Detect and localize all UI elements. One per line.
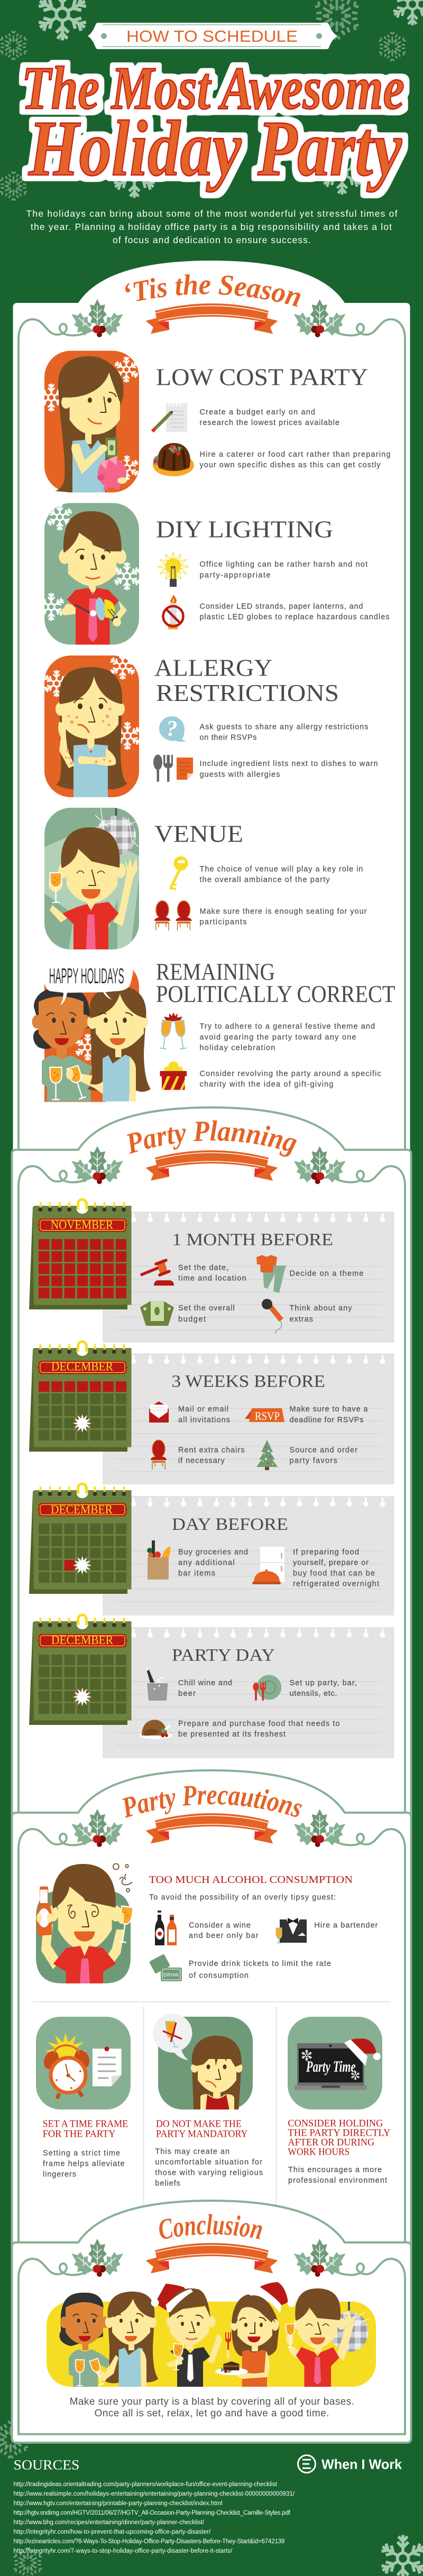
illustration: diy lighting man	[38, 503, 141, 645]
text: set the date: Set the date,	[178, 1263, 228, 1272]
text: rent chairs	[178, 1446, 244, 1465]
icon: bottles	[155, 1910, 177, 1945]
source links	[14, 2481, 295, 2554]
icon: key	[170, 856, 188, 889]
calendar: december first week	[29, 1342, 131, 1452]
banner: how to schedule: HOW TO SCHEDULE	[126, 27, 298, 45]
intro paragraph	[26, 208, 398, 245]
logo: when i work	[298, 2455, 402, 2473]
icon: gift	[160, 1061, 187, 1090]
heading: 3 weeks before: 3 WEEKS BEFORE	[171, 1372, 325, 1391]
text: party favors	[290, 1446, 357, 1465]
heading: work hours: THE PARTY DIRECTLY	[288, 2127, 391, 2138]
text: conclusion	[70, 2396, 354, 2419]
source links: http://hgtv.sndimg.com/HGTV/2011/06/27/HGTV_All-Occasion-Party-Planning-Checklist_Camille-Styles.pdf	[14, 2510, 291, 2516]
card: time frame	[36, 2017, 131, 2178]
text: overall budget: budget	[178, 1315, 206, 1324]
section heading: conclusion: Conclusion	[159, 2214, 262, 2239]
illustration: party group	[47, 2282, 376, 2387]
text: charity tip	[200, 1070, 381, 1089]
text: overall budget: Set the overall	[178, 1304, 235, 1313]
heading: remaining politically correct: REMAINING	[156, 959, 275, 985]
text: rsvp deadline: deadline for RSVPs	[290, 1416, 364, 1424]
text: charity tip: charity with the idea of gift-giving	[200, 1081, 333, 1089]
heading: not mandatory: PARTY MANDATORY	[156, 2128, 248, 2139]
text: work hours: This encourages a more	[288, 2166, 382, 2174]
text: lighting tip	[200, 560, 367, 579]
icon: notepad and pencil	[152, 403, 187, 432]
text: wine and beer	[189, 1921, 259, 1940]
icon: microphone	[262, 1299, 282, 1334]
text: led tip: Consider LED strands, paper lanterns, and	[200, 603, 363, 611]
icon: christmas tree	[256, 1440, 278, 1470]
icon: light bulb	[158, 552, 189, 587]
heading: allergy restrictions	[154, 655, 339, 706]
text: buy groceries: Buy groceries and	[178, 1548, 248, 1557]
section heading: party precautions	[17, 1786, 406, 1848]
text: conclusion: Once all is set, relax, let go and have a good time.	[95, 2408, 329, 2419]
text: think about extras: Think about any	[290, 1304, 352, 1313]
card: 1 month before	[29, 1199, 394, 1343]
person 1	[59, 2293, 109, 2387]
icon: laptop with santa hat	[295, 2038, 381, 2090]
text: prepare food: If preparing food	[293, 1548, 359, 1557]
heading: too much alcohol: TOO MUCH ALCOHOL CONSUMPTION	[149, 1874, 353, 1886]
heading: day before: DAY BEFORE	[172, 1515, 288, 1534]
illustration: low cost woman	[38, 351, 139, 493]
illustration: happy holidays pair	[32, 954, 151, 1102]
text: set the date	[178, 1263, 246, 1282]
speech bubble: no drinks	[153, 2014, 192, 2060]
heading: sources: SOURCES	[14, 2457, 79, 2472]
icon: rsvp card: RSVP	[255, 1409, 280, 1423]
text: chill wine	[178, 1679, 232, 1698]
source links: http://integrityhr.com/how-to-prevent-that-upcoming-office-party-disaster/	[14, 2529, 211, 2535]
text: budget tip: Create a budget early on and	[200, 408, 315, 417]
heading: party day: PARTY DAY	[172, 1646, 275, 1665]
snowflakes: bottom	[12, 2535, 423, 2576]
heading: remaining politically correct: POLITICALLY CORRECT	[156, 981, 396, 1008]
text: hire bartender: Hire a bartender	[314, 1921, 378, 1929]
icon: cutlery and list	[153, 755, 193, 782]
illustration: venue man	[44, 806, 139, 949]
heading: allergy restrictions: RESTRICTIONS	[156, 680, 339, 706]
text: rent chairs: if necessary	[178, 1457, 225, 1465]
icon: question bubble	[159, 716, 187, 742]
text: prepare fresh food	[178, 1720, 340, 1739]
section heading: tis the season	[17, 274, 406, 338]
icon: bartender	[276, 1918, 307, 1943]
calendar: december day before: DECEMBER	[51, 1503, 113, 1516]
icon: clothes	[256, 1255, 286, 1293]
heading: work hours: CONSIDER HOLDING	[288, 2118, 383, 2129]
text: venue tip: the overall ambiance of the party	[200, 876, 330, 884]
text: mail invitations: Mail or email	[178, 1405, 228, 1414]
source links: http://www.realsimple.com/holidays-entertaining/entertaining/party-planning-checklist-00000000000931/	[14, 2491, 295, 2497]
text: decide theme: Decide on a theme	[290, 1270, 364, 1278]
banner: how to schedule	[88, 23, 337, 49]
text: prepare food	[293, 1548, 379, 1588]
panel inner border	[19, 1185, 405, 1821]
text: seating tip	[200, 907, 367, 926]
text: prepare food: yourself, prepare or	[293, 1558, 369, 1567]
text: mail invitations	[178, 1405, 230, 1424]
person 5	[286, 2288, 355, 2387]
calendar: december first week: DECEMBER	[51, 1360, 114, 1373]
text: drink tickets	[189, 1960, 331, 1980]
icon: question bubble: ?	[166, 717, 178, 741]
text: led tip: plastic LED globes to replace hazardous candles	[200, 613, 389, 622]
source links: http://www.bhg.com/recipes/entertaining/dinner/party-planner-checklist/	[14, 2519, 205, 2526]
heading: low cost party: LOW COST PARTY	[156, 364, 368, 391]
intro paragraph: the year. Planning a holiday office party is a big responsibility and takes a lot	[31, 221, 392, 232]
text: not mandatory: beliefs	[155, 2179, 180, 2187]
text: not mandatory: those with varying religious	[155, 2169, 263, 2177]
icon: plate and cutlery	[253, 1675, 281, 1701]
text: chill wine: beer	[178, 1689, 196, 1698]
heading: work hours	[288, 2118, 391, 2158]
text: prepare fresh food: Prepare and purchase food that needs to	[178, 1720, 340, 1728]
text: caterer tip	[200, 450, 390, 469]
section heading: conclusion	[17, 2214, 406, 2277]
icon: drink tickets	[149, 1954, 182, 1981]
text: work hours: professional environment	[288, 2176, 387, 2185]
card: work hours	[288, 2017, 391, 2185]
text: set up party: utensils, etc.	[290, 1689, 337, 1698]
icon: two chairs	[154, 901, 191, 930]
text: festive theme tip: holiday celebration	[200, 1044, 275, 1052]
text: lighting tip: Office lighting can be rather harsh and not	[200, 560, 367, 569]
icon: no candles	[163, 595, 183, 629]
card: day before	[29, 1484, 394, 1615]
text: prepare fresh food: be presented at its freshest	[178, 1730, 286, 1739]
source links: http://integrityhr.com/7-ways-to-stop-holiday-office-party-disaster-before-it-starts/	[14, 2548, 233, 2554]
calendar: december party day	[29, 1615, 131, 1725]
text: rsvp deadline: Make sure to have a	[290, 1405, 368, 1414]
icon: laptop with santa hat: Party Time	[306, 2058, 355, 2075]
text: festive theme tip: Try to adhere to a general festive theme and	[200, 1022, 375, 1031]
icon: note	[93, 2047, 122, 2086]
text: drink tickets: of consumption	[189, 1971, 249, 1980]
calendar: december day before	[29, 1484, 131, 1594]
text: time frame	[43, 2149, 125, 2178]
text: prepare food: buy food that can be	[293, 1569, 375, 1578]
person 4 with santa hat	[215, 2282, 295, 2387]
text: time frame: lingerers	[43, 2170, 76, 2178]
intro paragraph: of focus and dedication to ensure success.	[113, 235, 311, 245]
heading: time frame: FOR THE PARTY	[43, 2128, 116, 2139]
text: drink tickets: Provide drink tickets to limit the rate	[189, 1960, 331, 1968]
heading: allergy restrictions: ALLERGY	[154, 655, 272, 681]
text: venue tip: The choice of venue will play a key role in	[200, 865, 363, 873]
card: party day	[29, 1615, 394, 1758]
text: rsvp allergy tip: Ask guests to share any allergy restrictions	[200, 723, 368, 732]
text: mail invitations: all invitations	[178, 1416, 230, 1424]
section heading: party precautions: Party Precautions	[123, 1786, 302, 1818]
card: 3 weeks before	[29, 1342, 394, 1484]
text: ingredient tip: guests with allergies	[200, 770, 280, 779]
text: chill wine: Chill wine and	[178, 1679, 232, 1687]
source links: http://ezinearticles.com/?8-Ways-To-Stop-Holiday-Office-Party-Disasters-Before-They-Start&id=6742139	[14, 2538, 284, 2545]
illustration: happy holidays pair: HAPPY HOLIDAYS	[49, 964, 124, 988]
icon: rsvp card	[245, 1408, 284, 1423]
text: charity tip: Consider revolving the party around a specific	[200, 1070, 381, 1078]
text: work hours	[288, 2166, 387, 2185]
intro paragraph: The holidays can bring about some of the most wonderful yet stressful times of	[26, 208, 398, 219]
illustration: allergic woman	[43, 653, 141, 797]
text: wine and beer: and beer only bar	[189, 1932, 259, 1940]
icon: fridge and cloche	[252, 1547, 284, 1584]
icon: chair	[151, 1440, 167, 1470]
illustration: tipsy man	[36, 1864, 133, 1983]
card: not mandatory	[153, 2014, 263, 2187]
person 3 with santa hat	[151, 2284, 222, 2387]
text: time frame: frame helps alleviate	[43, 2160, 125, 2168]
heading: diy lighting: DIY LIGHTING	[156, 516, 333, 543]
text: not mandatory: uncomfortable situation for	[155, 2158, 262, 2166]
disco ball	[330, 2302, 370, 2352]
text: set the date: time and location	[178, 1274, 246, 1282]
text: rsvp allergy tip	[200, 723, 368, 742]
text: think about extras	[290, 1304, 352, 1324]
heading: time frame: SET A TIME FRAME	[43, 2119, 128, 2130]
text: think about extras: extras	[290, 1315, 313, 1324]
heading: venue: VENUE	[154, 821, 243, 847]
text: rent chairs: Rent extra chairs	[178, 1446, 244, 1454]
person 2	[89, 2292, 159, 2387]
source links: http://www.hgtv.com/entertaining/printable-party-planning-checklist/index.html	[14, 2500, 222, 2507]
person: sad woman	[191, 2036, 242, 2109]
panel inner border	[19, 1848, 405, 2249]
text: conclusion: Make sure your party is a blast by covering all of your bases.	[70, 2396, 354, 2407]
text: seating tip: participants	[200, 918, 246, 926]
text: lighting tip: party-appropriate	[200, 571, 271, 579]
text: ingredient tip: Include ingredient lists next to dishes to warn	[200, 760, 378, 768]
icon: wine bucket	[146, 1669, 168, 1701]
section heading: party planning: Party Planning	[127, 1120, 297, 1157]
text: buy groceries	[178, 1548, 248, 1578]
section heading: party planning	[17, 1120, 406, 1185]
heading: work hours: AFTER OR DURING	[288, 2137, 374, 2148]
title	[22, 55, 404, 192]
text: not mandatory	[155, 2148, 263, 2187]
heading: time frame	[43, 2119, 128, 2139]
text: caterer tip: Hire a caterer or food cart rather than preparing	[200, 450, 390, 459]
icon: gavel	[141, 1260, 174, 1286]
calendar: december party day: DECEMBER	[51, 1633, 114, 1647]
calendar: november	[29, 1199, 131, 1309]
panel inner border	[19, 2277, 405, 2434]
icon: alarm clock	[41, 2033, 92, 2099]
icon: money	[140, 1301, 174, 1326]
panel: party planning	[12, 1107, 411, 1821]
text: prepare food: refrigerated overnight	[293, 1580, 379, 1588]
text: buy groceries: any additional	[178, 1558, 235, 1567]
text: ingredient tip	[200, 760, 378, 779]
panel: tis the season	[13, 261, 410, 1160]
icon: turkey	[139, 1720, 172, 1739]
text: venue tip	[200, 865, 363, 884]
text: overall budget	[178, 1304, 235, 1324]
text: not mandatory: This may create an	[155, 2148, 229, 2156]
text: party favors: party favors	[290, 1457, 337, 1465]
icon: envelope	[149, 1401, 169, 1423]
text: caterer tip: your own specific dishes as this can get costly	[200, 461, 381, 469]
text: budget tip	[200, 408, 339, 427]
icon: drink tickets: DRINK	[163, 1972, 179, 1978]
text: party favors: Source and order	[290, 1446, 357, 1454]
text: budget tip: research the lowest prices available	[200, 419, 339, 427]
text: wine and beer: Consider a wine	[189, 1921, 251, 1929]
logo: when i work: When I Work	[321, 2456, 402, 2472]
heading: work hours: WORK HOURS	[288, 2147, 350, 2158]
text: rsvp deadline	[290, 1405, 368, 1424]
text: set up party: Set up party, bar,	[290, 1679, 357, 1687]
text: time frame: Setting a strict time	[43, 2149, 120, 2158]
source links: http://tradingideas.orientaltrading.com/party-planners/workplace-fun/office-event-planning-checklist	[14, 2481, 278, 2488]
heading: 1 month before: 1 MONTH BEFORE	[172, 1231, 333, 1250]
text: buy groceries: bar items	[178, 1569, 215, 1578]
panel inner border	[19, 338, 405, 1160]
panel: conclusion	[12, 2201, 411, 2443]
icon: champagne toast	[159, 1012, 188, 1049]
heading: remaining politically correct	[156, 959, 396, 1008]
calendar: november: NOVEMBER	[51, 1218, 114, 1232]
icon: groceries	[147, 1540, 170, 1580]
text: rsvp allergy tip: on their RSVPs	[200, 733, 257, 742]
text: festive theme tip	[200, 1022, 375, 1052]
panel: party precautions	[12, 1770, 411, 2249]
section heading: tis the season: ‘Tis the Season	[125, 274, 300, 307]
text: seating tip: Make sure there is enough seating for your	[200, 907, 367, 916]
text: set up party	[290, 1679, 357, 1698]
text: festive theme tip: avoid gearing the party toward any one	[200, 1033, 356, 1041]
heading: not mandatory	[156, 2119, 248, 2139]
text: led tip	[200, 603, 389, 622]
heading: not mandatory: DO NOT MAKE THE	[156, 2119, 242, 2130]
icon: holiday cake	[153, 443, 194, 476]
text: tipsy guest intro: To avoid the possibility of an overly tipsy guest:	[149, 1894, 336, 1902]
